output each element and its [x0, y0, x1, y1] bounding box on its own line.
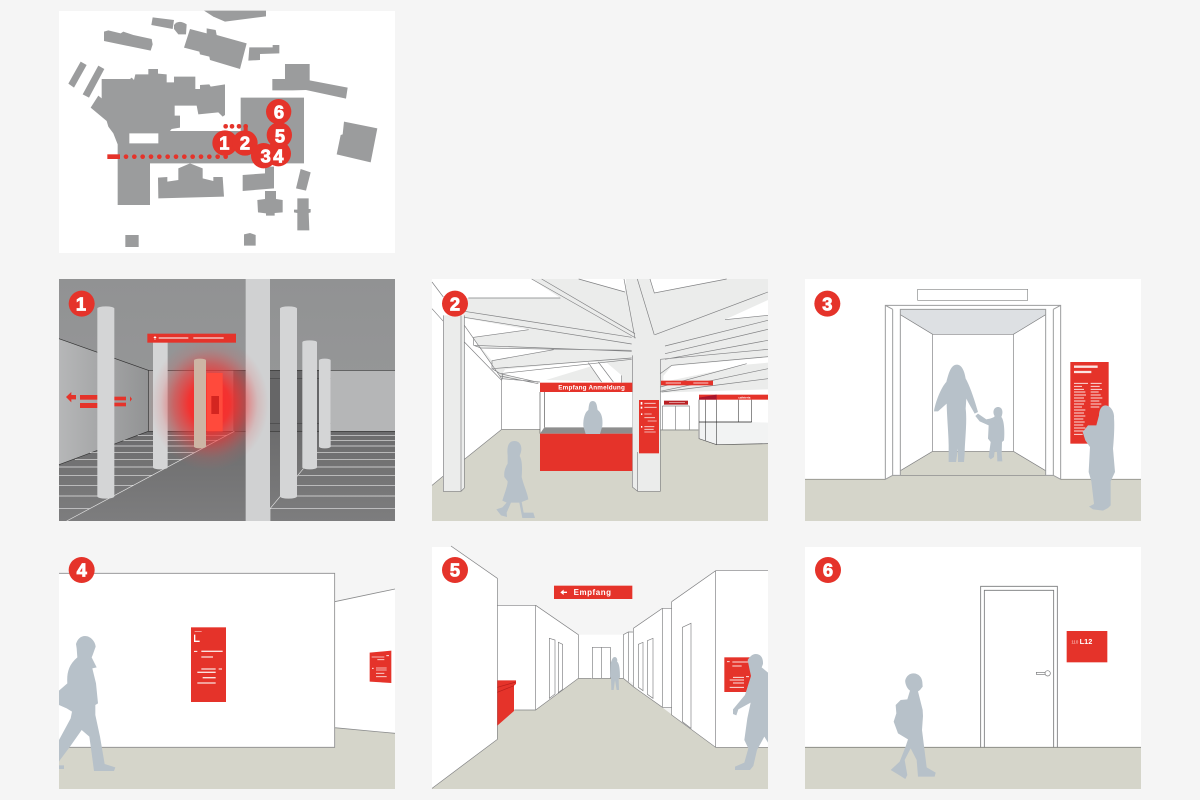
hallway walls right — [623, 571, 768, 747]
Empfang sign: Empfang — [574, 588, 612, 597]
number badge 6 — [815, 557, 841, 583]
overhead panel — [918, 289, 1028, 300]
number badge 3 — [814, 291, 840, 317]
location markers: 1 — [219, 132, 229, 153]
panel 3: lift — [805, 279, 1141, 521]
receptionist — [583, 401, 602, 434]
number badge 2 — [442, 291, 468, 317]
back pillars — [97, 306, 331, 499]
location markers: 6 — [274, 101, 284, 122]
reception desk — [540, 383, 632, 471]
room sign: L12 — [1080, 637, 1092, 646]
number badge 5: 5 — [450, 560, 460, 581]
panel 5: hallway — [432, 546, 768, 789]
location markers — [212, 99, 292, 168]
walls — [59, 573, 395, 747]
directory sign — [1070, 362, 1109, 444]
wall directory sign — [191, 627, 226, 702]
cafeteria kiosk: cafeteria — [738, 395, 751, 399]
near left wall — [432, 546, 497, 788]
destination sign in glow — [207, 373, 223, 431]
ceiling lines — [432, 279, 768, 485]
number badge 6: 6 — [823, 560, 833, 581]
panel 6: room door — [805, 547, 1141, 789]
left column — [443, 315, 464, 491]
cafeteria kiosk — [699, 395, 768, 445]
door handle — [1036, 671, 1050, 676]
lift interior — [900, 309, 1046, 475]
room sign: 110 — [1071, 640, 1079, 645]
location markers: 5 — [275, 125, 285, 146]
map buildings — [68, 11, 377, 247]
hanging signs — [661, 381, 713, 405]
panel 1: entrance hall — [59, 279, 395, 521]
panel 4: corridor wall — [59, 557, 395, 789]
walking man with backpack — [59, 636, 115, 771]
reception desk: Empfang Anmeldung — [558, 385, 625, 392]
location markers: 2 — [240, 132, 250, 153]
floor lines — [59, 431, 395, 521]
wall arrow sign — [66, 392, 132, 408]
lift frame — [885, 305, 1061, 479]
red container — [497, 680, 516, 726]
room sign — [1067, 631, 1107, 662]
doors — [662, 406, 689, 430]
centre column — [632, 355, 660, 491]
glowing pillar — [194, 359, 206, 448]
panel 2: reception — [432, 279, 768, 521]
ceiling beams — [461, 279, 768, 393]
far wall sign — [370, 651, 391, 683]
location markers: 4 — [273, 146, 284, 167]
panel: site map — [59, 11, 395, 253]
number badge 1 — [69, 291, 95, 317]
floor — [432, 429, 768, 521]
girl — [496, 441, 535, 518]
number badge 4: 4 — [77, 560, 88, 581]
number badge 4 — [69, 557, 95, 583]
walking man — [733, 654, 768, 770]
floor and walls — [59, 339, 395, 521]
floor — [432, 678, 768, 789]
ceiling sign — [147, 334, 236, 343]
number badge 5 — [442, 557, 468, 583]
distant person — [610, 657, 620, 690]
hallway walls left — [497, 605, 623, 710]
floor — [59, 728, 395, 789]
floor — [805, 747, 1141, 789]
number badge 3: 3 — [822, 293, 832, 314]
number badge 2: 2 — [450, 293, 460, 314]
door — [981, 586, 1057, 747]
red glow — [150, 337, 269, 470]
adult viewing sign — [1083, 405, 1115, 511]
floor — [805, 475, 1141, 521]
centre pillar — [246, 279, 270, 521]
schoolchild with backpack — [891, 673, 936, 779]
column directory sign — [639, 400, 659, 453]
wall sign — [724, 657, 752, 692]
Empfang sign — [554, 586, 632, 599]
back doors — [592, 647, 610, 678]
mother and child — [934, 365, 1004, 462]
location markers: 3 — [261, 146, 271, 167]
number badge 1: 1 — [76, 293, 86, 314]
route — [107, 124, 248, 159]
